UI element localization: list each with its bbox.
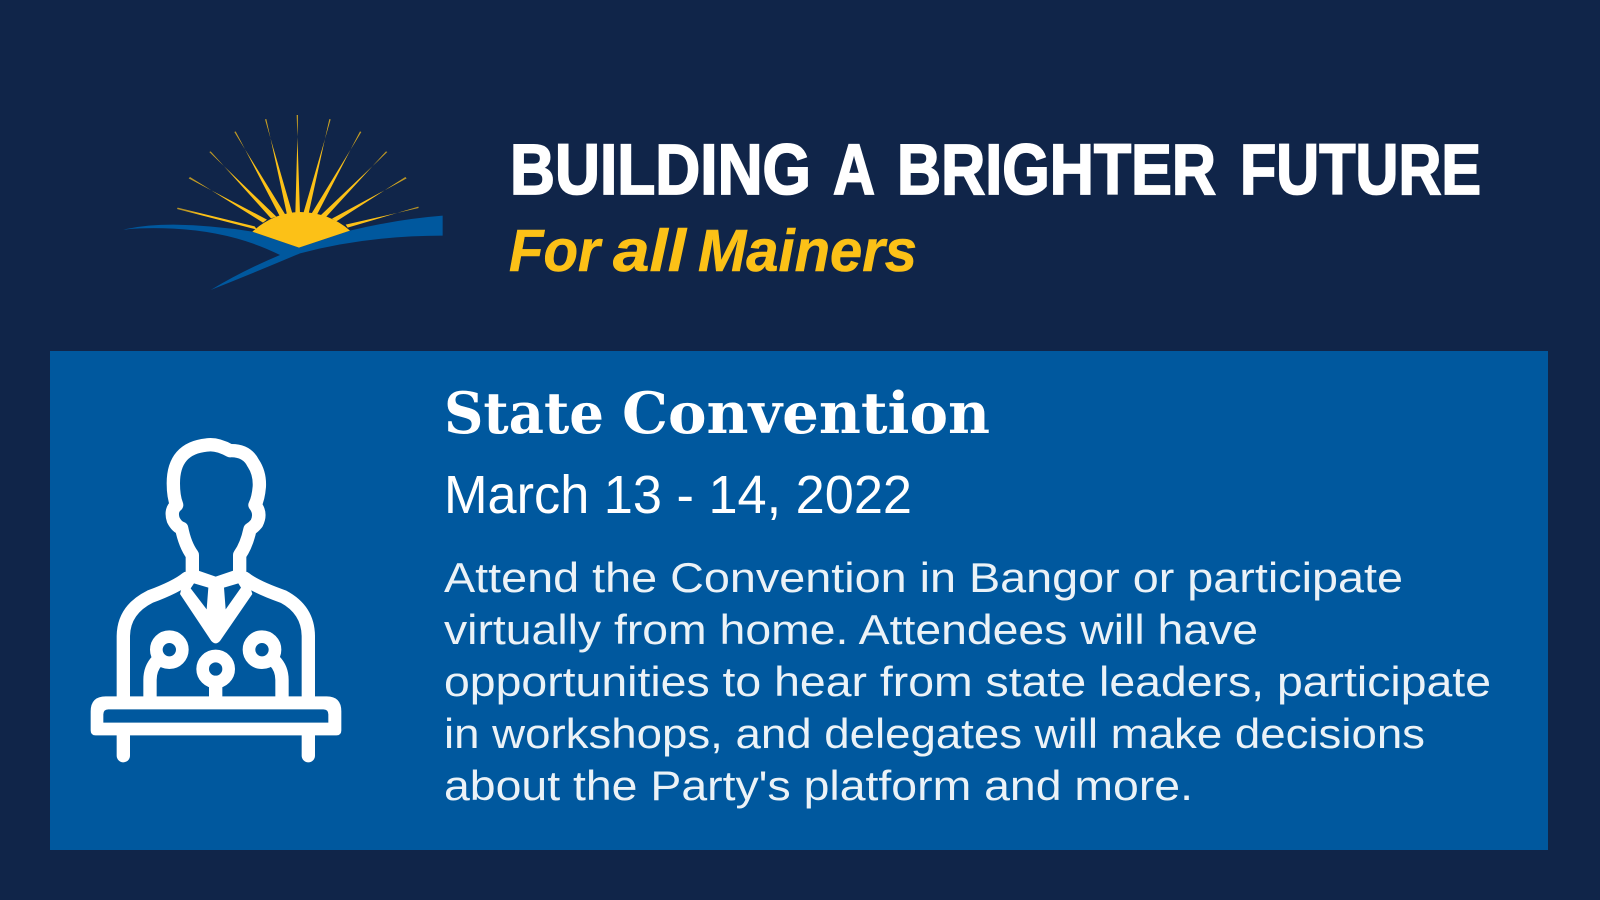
icon head: [172, 445, 259, 575]
icon podium: [91, 696, 341, 735]
body text: opportunities to hear from state leaders, participate: [444, 658, 1491, 705]
panel: state convention: [50, 351, 1548, 850]
subtitle: [509, 218, 917, 284]
icon: speaker at podium: [91, 445, 341, 756]
body text: about the Party's platform and more.: [444, 762, 1193, 809]
title: FUTURE: [1240, 131, 1481, 210]
body text: [444, 554, 1491, 809]
title: A: [833, 131, 875, 210]
logo sun disc: [252, 212, 350, 248]
title: BUILDING: [510, 131, 811, 210]
logo: rising sun over blue swoosh: [123, 115, 443, 290]
logo blue swoosh: [123, 216, 443, 290]
icon microphones: [156, 637, 182, 663]
panel heading: State: [444, 380, 604, 447]
icon collar and tie: [180, 571, 252, 643]
panel heading: [444, 380, 990, 447]
body text: in workshops, and delegates will make decisions: [444, 710, 1425, 757]
panel heading: Convention: [622, 380, 990, 447]
event date: March 13 - 14, 2022: [444, 465, 912, 525]
body text: virtually from home. Attendees will have: [444, 606, 1258, 653]
body text: Attend the Convention in Bangor or participate: [444, 554, 1403, 601]
subtitle: all: [613, 218, 688, 284]
title: BRIGHTER: [897, 131, 1216, 210]
logo sun rays: [177, 115, 419, 230]
icon shoulders: [123, 578, 308, 697]
subtitle: Mainers: [698, 218, 917, 284]
subtitle: For: [509, 218, 603, 284]
title: [510, 131, 1481, 210]
